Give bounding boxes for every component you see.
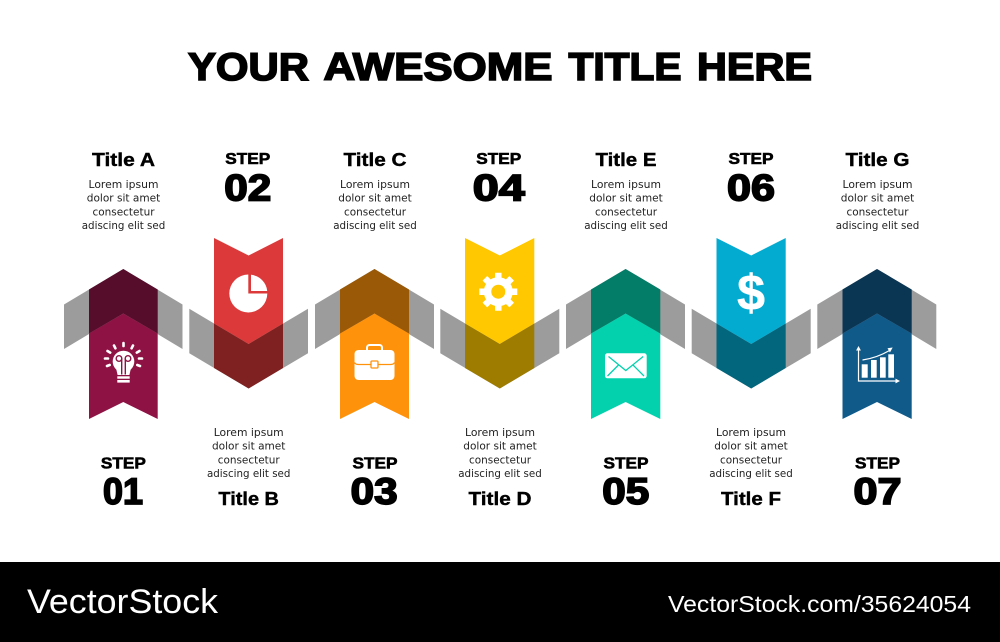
step 5 panel <box>566 149 685 512</box>
text block E: dolor sit amet <box>589 192 663 205</box>
ribbon 1 <box>89 314 158 419</box>
step 02 label: STEP <box>225 151 270 168</box>
heading: Title C: Title C <box>344 149 406 170</box>
text block F <box>709 426 793 480</box>
step 7 panel <box>817 149 936 512</box>
text block C: consectetur <box>344 205 406 218</box>
title: AWESOME <box>324 46 552 89</box>
ribbon overlap 1 <box>89 269 158 334</box>
text block B: Lorem ipsum <box>214 426 284 439</box>
text block D: adiscing elit sed <box>458 467 542 480</box>
step 05 label: STEP <box>604 456 648 473</box>
ribbon overlap 5 <box>591 269 660 334</box>
text block C: Lorem ipsum <box>340 178 410 191</box>
text block A: adiscing elit sed <box>82 219 165 232</box>
text block F: adiscing elit sed <box>709 467 793 480</box>
icon: growth chart <box>856 346 900 383</box>
icon: pie chart <box>229 274 267 312</box>
grey chevron 2 <box>189 309 308 388</box>
grey chevron 4 <box>440 309 559 388</box>
icon: envelope <box>605 353 647 378</box>
text block A: dolor sit amet <box>87 192 161 205</box>
step 01 label: 01 <box>103 471 143 512</box>
step 06 label: 06 <box>727 168 775 208</box>
grey chevron 1 <box>64 269 182 349</box>
text block A: Lorem ipsum <box>88 178 158 191</box>
text block C: adiscing elit sed <box>333 219 417 232</box>
text block G: Lorem ipsum <box>842 178 912 191</box>
title <box>188 46 812 89</box>
title: YOUR <box>188 46 309 89</box>
ribbon overlap 7 <box>842 269 912 334</box>
ribbon 6 <box>716 238 786 344</box>
icon: briefcase <box>354 345 394 380</box>
ribbon 3 <box>340 314 409 419</box>
ribbon overlap 4 <box>465 324 534 388</box>
heading: Title F: Title F <box>721 488 781 509</box>
footer bar <box>0 562 1000 642</box>
step 03 label: STEP <box>352 456 398 473</box>
grey chevron 6 <box>692 309 811 388</box>
text block F: consectetur <box>720 453 782 466</box>
icon: light bulb <box>105 343 142 383</box>
step 2 panel <box>189 151 308 509</box>
step 05 label <box>602 456 649 512</box>
text block D: Lorem ipsum <box>465 426 535 439</box>
text block E <box>584 178 668 232</box>
title: TITLE <box>568 46 682 89</box>
step 01 label: STEP <box>101 456 146 473</box>
step 07 label <box>854 456 902 512</box>
step 07 label: STEP <box>855 456 900 473</box>
text block D: consectetur <box>469 453 531 466</box>
text block G: consectetur <box>846 205 909 218</box>
step 4 panel <box>440 151 559 509</box>
ribbon 4 <box>465 238 534 344</box>
footer logo text: VectorStock <box>27 583 219 621</box>
step 05 label: 05 <box>602 471 649 512</box>
step 03 label <box>351 456 398 512</box>
step 03 label: 03 <box>351 471 398 512</box>
heading: Title E: Title E <box>596 149 656 170</box>
step 6 panel <box>692 151 811 509</box>
text block E: Lorem ipsum <box>591 178 661 191</box>
text block C <box>333 178 417 232</box>
step 06 label <box>727 151 775 208</box>
text block B: consectetur <box>218 453 280 466</box>
text block G: adiscing elit sed <box>836 219 919 232</box>
ribbon 7 <box>842 314 912 419</box>
footer image id: VectorStock.com/35624054 <box>668 591 971 617</box>
step 1 panel <box>64 149 182 512</box>
grey chevron 7 <box>817 269 936 349</box>
text block F: dolor sit amet <box>714 440 788 453</box>
text block B: adiscing elit sed <box>207 467 290 480</box>
step 06 label: STEP <box>728 151 774 168</box>
step 01 label <box>101 456 146 512</box>
heading: Title A: Title A <box>92 149 155 170</box>
ribbon 5 <box>591 314 660 419</box>
text block D: dolor sit amet <box>463 440 537 453</box>
grey chevron 5 <box>566 269 685 349</box>
step 02 label <box>224 151 271 208</box>
step 02 label: 02 <box>224 168 271 208</box>
step 04 label: STEP <box>476 151 521 168</box>
text block G <box>836 178 919 232</box>
grey chevron 3 <box>315 269 434 349</box>
text block E: adiscing elit sed <box>584 219 668 232</box>
text block A: consectetur <box>92 205 155 218</box>
text block G: dolor sit amet <box>841 192 915 205</box>
ribbon 2 <box>214 238 283 344</box>
heading: Title G: Title G <box>846 149 910 170</box>
title: HERE <box>697 46 812 89</box>
ribbon overlap 2 <box>214 324 283 388</box>
step 04 label: 04 <box>473 168 525 208</box>
text block B: dolor sit amet <box>212 440 286 453</box>
heading: Title B: Title B <box>218 488 279 509</box>
text block B <box>207 426 290 480</box>
text block A <box>82 178 165 232</box>
icon: dollar sign: $ <box>737 265 765 321</box>
ribbon overlap 6 <box>716 324 786 388</box>
ribbon overlap 3 <box>340 269 409 334</box>
text block F: Lorem ipsum <box>716 426 786 439</box>
text block E: consectetur <box>595 205 657 218</box>
heading: Title D: Title D <box>468 488 532 509</box>
step 04 label <box>473 151 525 208</box>
step 07 label: 07 <box>854 471 902 512</box>
icon: gear <box>479 273 517 311</box>
step 3 panel <box>315 149 434 512</box>
text block D <box>458 426 542 480</box>
text block C: dolor sit amet <box>338 192 412 205</box>
